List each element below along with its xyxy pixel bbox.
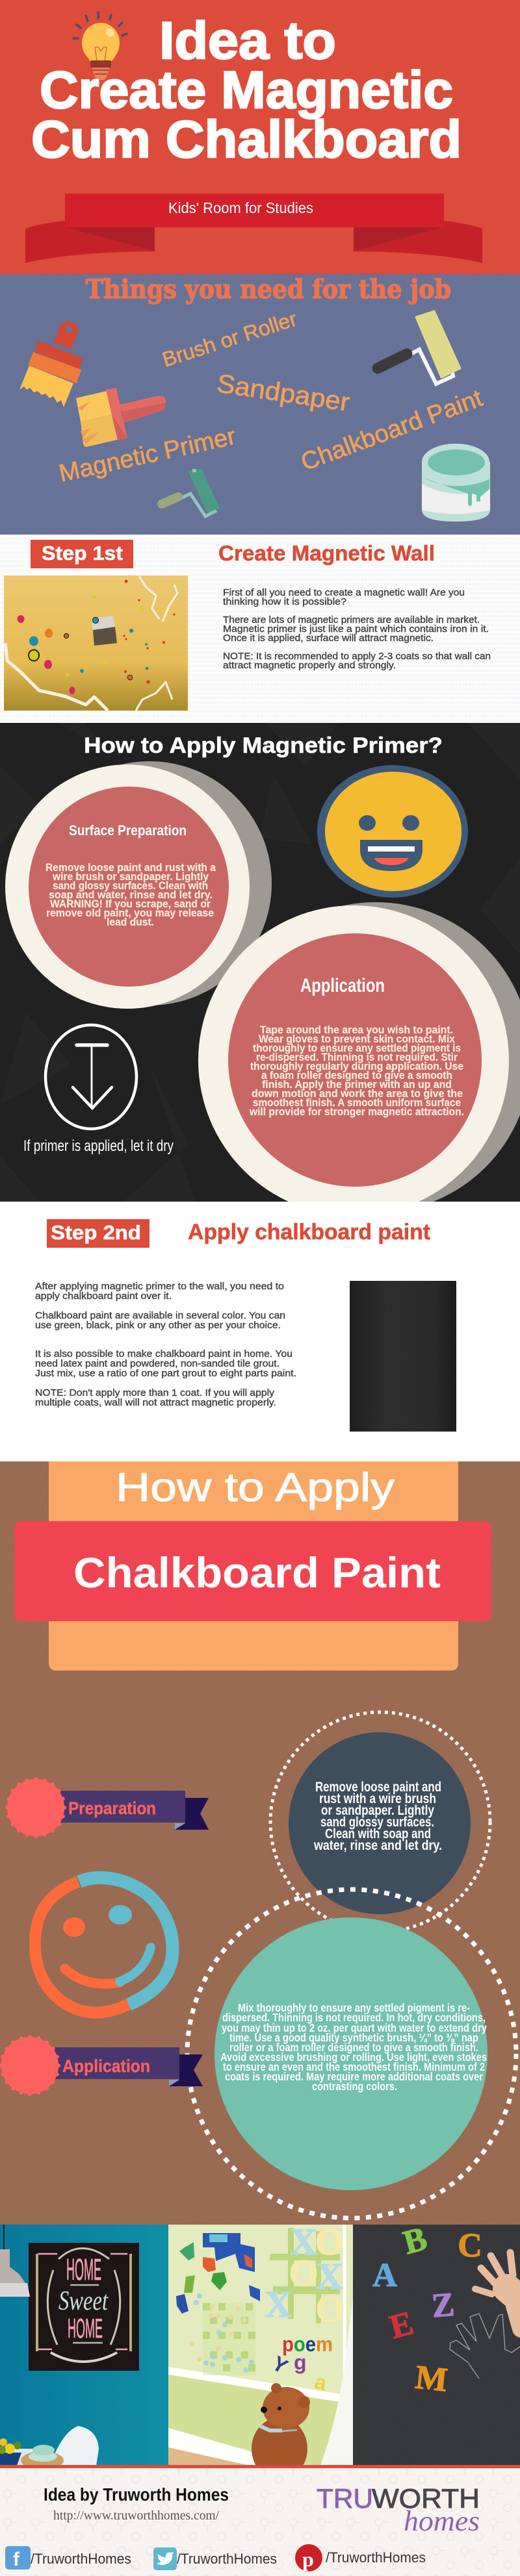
circle: application details: time. Use a good quality synthetic brush, ¼” to ⅜” nap [229,2031,478,2044]
label: Sandpaper: Sandpaper [215,369,352,417]
pendant lamp [0,2225,30,2297]
text: magnetic wall explanation: thinking how it is possible? [223,597,346,607]
circle: surface preparation: soap and water, rinse and let dry. [49,889,213,901]
table with cup and fruit [0,2426,99,2465]
title plate [14,1461,491,1671]
icon: red paint brush [20,322,83,407]
step badge [31,540,133,568]
circle: surface preparation: Surface Preparation [69,822,187,839]
tic tac toe: O [315,2288,345,2330]
website url: http://www.truworthhomes.com/ [53,2508,219,2523]
panel: footer [0,2465,520,2576]
panel: step 1 [0,535,520,723]
panel: step 2 [0,1202,520,1461]
circle: application: thoroughly to ensure any settled pigment is [253,1042,461,1054]
photo: magnetic game wall [168,2221,353,2480]
tic tac toe: X [316,2255,343,2297]
circle: application details: contrasting colors. [312,2080,397,2093]
text: chalkboard paint explanation: need latex paint and powdered, non-sanded tile grout. [35,1359,280,1369]
magnetic letters: poem: poem [282,2332,333,2356]
circle: preparation details [270,1712,490,1932]
circle: surface preparation: wire brush or sandpaper. Lightly [52,871,209,883]
chalk poster: HOME [66,2253,101,2286]
icon: laughing emoji [317,765,468,898]
icon: paint can [422,444,490,522]
chalk poster [29,2243,139,2371]
photo: chalkboard with letters [353,2220,520,2466]
tic tac toe: O [289,2252,318,2294]
circle: surface preparation: sand glossy surfaces. Clean with [53,880,208,892]
text: chalkboard paint explanation: Chalkboard paint are available in several color. You can [35,1311,285,1321]
text: magnetic wall explanation: NOTE: It is recommended to apply 2-3 coats so that wall can [223,651,491,662]
circle: application: finish. Apply the primer with an up and [262,1079,452,1091]
icon: two-tone smiley [35,1878,172,2012]
text: chalkboard paint explanation [35,1282,296,1408]
icon: yellow flat brush [76,388,166,447]
foam letters: E [386,2305,417,2346]
title: Idea to [159,12,336,70]
circle: preparation details: or sandpaper. Lightly [321,1803,434,1818]
heading: Apply chalkboard paint [188,1220,430,1244]
logo: homes [404,2505,480,2537]
title [31,12,462,169]
foam letters: A [372,2257,397,2294]
ribbon: preparation [7,1779,209,1836]
circle: preparation details: Remove loose paint and [315,1780,441,1795]
logo [317,2483,480,2537]
text: magnetic wall explanation: First of all you need to create a magnetic wall! Are you [223,588,465,598]
text: magnetic wall explanation: Magnetic primer is just like a paint which contains iron in it. [223,624,489,635]
text: chalkboard paint explanation: It is also possible to make chalkboard paint in home. You [35,1349,292,1359]
teddy bear [252,2383,310,2465]
circle: surface preparation: Remove loose paint and rust with a [46,862,216,874]
lower wall and trim [168,2225,353,2466]
icon: large yellow roller [378,311,460,384]
step badge: Step 2nd [51,1221,141,1244]
circle: application: Wear gloves to prevent skin contact. Mix [259,1033,456,1045]
logo: TRU [317,2483,373,2514]
icon: small green roller [162,469,219,516]
tic tac toe: O [315,2221,344,2263]
panel: how to apply magnetic primer [0,723,520,1216]
caption: If primer is applied, let it dry [23,1137,174,1155]
ribbon banner [25,194,482,263]
panel: things you need [0,274,520,535]
label: Magnetic Primer: Magnetic Primer [57,423,239,488]
tic tac toe: X [290,2221,317,2263]
social: pinterest [295,2544,426,2571]
logo: WORTH [372,2483,480,2514]
photo: home sweet home chalkboard [0,2225,168,2469]
circle: application details [187,1889,516,2218]
panel: header [0,0,520,275]
heading: How to Apply Magnetic Primer? [84,733,443,758]
chalk poster: HOME [68,2313,103,2343]
checkers board [189,2293,255,2375]
circle: application [198,902,520,1216]
text: chalkboard paint explanation: multiple coats, wall will not attract magnetic properly. [35,1398,276,1408]
foam letters: C [458,2227,482,2264]
chalk hand outline [450,2314,520,2379]
circle: application: Tape around the area you wish to paint. [260,1024,453,1036]
circle: application: thoroughly regularly during application. Use [250,1061,463,1072]
social: facebook: f [13,2549,20,2570]
circle: preparation details: rust with a wire brush [319,1791,436,1806]
social: facebook [5,2546,131,2570]
ribbon: preparation: Preparation [68,1799,156,1818]
magnetic letters: poem [275,2340,332,2390]
circle: surface preparation: lead dust. [107,916,154,928]
chalk poster: Sweet [58,2286,109,2316]
text: chalkboard paint explanation: apply chalkboard paint over it. [35,1291,172,1302]
text: magnetic wall explanation [223,588,491,671]
circle: preparation details: sand glossy surfaces. [320,1815,434,1830]
social: twitter [153,2547,277,2570]
heading: Create Magnetic Wall [218,541,435,565]
circle: application: a foam roller designed to give a smooth [261,1070,452,1081]
title: Cum Chalkboard [31,110,462,169]
title plate: How to Apply [116,1465,395,1510]
text: magnetic wall explanation: attract magnetic properly and strongly. [223,661,396,671]
ribbon: application [1,2037,203,2094]
social: twitter: /TruworthHomes [177,2551,277,2567]
text: chalkboard paint explanation: NOTE: Don't apply more than 1 coat. If you will apply [35,1388,275,1398]
foam letters: Z [430,2286,456,2325]
credit: Idea by Truworth Homes [44,2484,229,2505]
magnetic letters: poem: g [294,2351,307,2374]
icon: down arrow in ring [46,1025,136,1129]
step badge: Step 1st [42,542,123,564]
heading: Things you need for the job [86,274,451,305]
foam letters: B [400,2220,431,2262]
circle: surface preparation: remove old paint, you may release [46,907,214,919]
puzzle pieces [176,2233,260,2314]
text: chalkboard paint explanation: Just mix, use a ratio of one part grout to eight parts paint. [35,1369,296,1379]
label: Chalkboard Paint: Chalkboard Paint [298,385,486,476]
social: facebook: /TruworthHomes [31,2551,131,2567]
circle: application details: Mix thoroughly to ensure any settled pigment is re- [238,2001,470,2014]
magnetic letters: poem: Y [268,2351,292,2379]
social: pinterest: /TruworthHomes [326,2549,426,2566]
foam letters: M [413,2359,449,2399]
label: Brush or Roller: Brush or Roller [159,307,300,372]
circle: preparation details: water, rinse and let dry. [313,1838,442,1853]
photo: magnetic wall map [4,575,188,711]
title plate: Chalkboard Paint [73,1548,441,1597]
step badge [47,1219,150,1248]
child hand [475,2253,520,2329]
tic tac toe [265,2228,343,2323]
text: magnetic wall explanation: There are lots of magnetic primers are available in market. [223,615,480,625]
tic tac toe: X [265,2283,292,2325]
title: Create Magnetic [40,61,453,120]
circle: application: smoothest finish. A smooth uniform surface [253,1097,461,1109]
social: pinterest: p [302,2547,314,2571]
ribbon banner: Kids' Room for Studies [168,199,313,216]
circle: application: re-dispersed. Thinning is not required. Stir [256,1052,458,1063]
circle: application: Application [300,975,385,996]
icon: light bulb [73,12,127,80]
panel: how to apply chalkboard paint [0,1461,520,2225]
text: chalkboard paint explanation: use green, black, pink or any other as per your choice. [35,1320,281,1331]
image: chalkboard texture [350,1281,456,1432]
circle: surface preparation [5,761,272,1009]
circle: application: down motion and work the area to give the [252,1088,463,1100]
text: chalkboard paint explanation: After applying magnetic primer to the wall, you need to [35,1282,284,1292]
circle: preparation details: Clean with soap and [325,1826,431,1841]
text: magnetic wall explanation: Once it is applied, surface will attract magnetic. [223,633,434,644]
ribbon: application: Application [62,2056,150,2076]
circle: application: will provide for stronger magnetic attraction. [249,1106,464,1118]
foam letters [372,2229,480,2392]
magnetic letters: poem: a [312,2369,330,2395]
circle: application details: roller or a foam roller designed to give a smooth finish. [229,2041,478,2054]
circle: surface preparation: WARNING! If you scrape, sand or [50,898,211,910]
